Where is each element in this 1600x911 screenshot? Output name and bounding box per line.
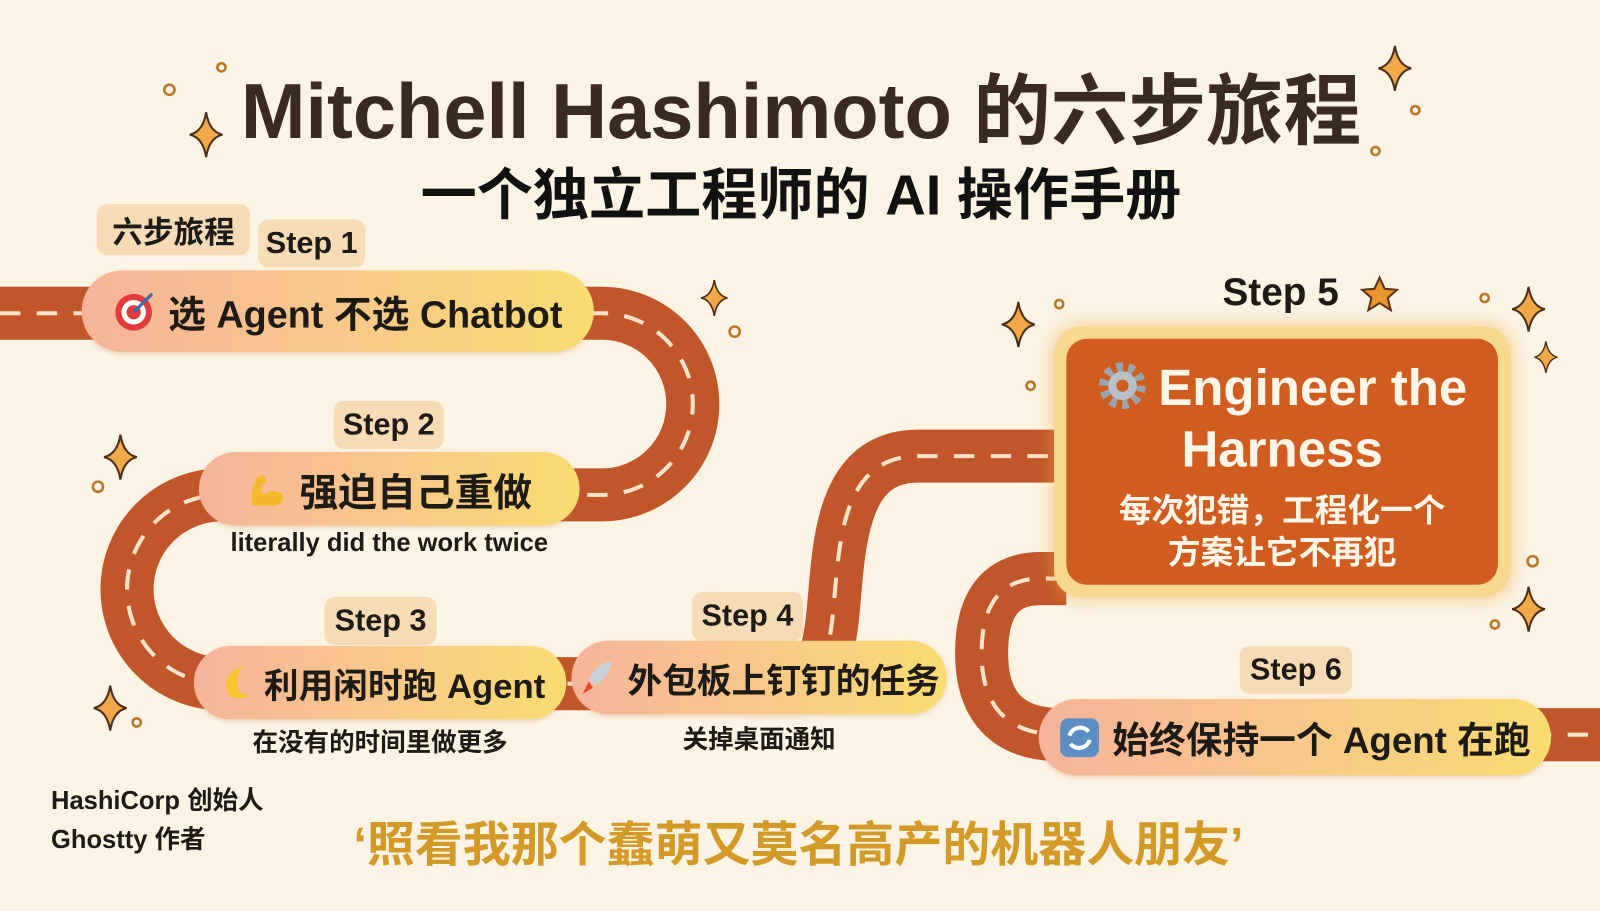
step 6 tag (1240, 646, 1352, 694)
step 6 tag: Step 6 (1250, 653, 1342, 686)
subtitle: 一个独立工程师的 AI 操作手册 (421, 163, 1181, 227)
step 1 tag (258, 219, 365, 267)
tag: six steps (97, 204, 250, 255)
step 4 pill: 外包板上钉钉的任务 (628, 662, 940, 701)
step 3 pill (194, 646, 566, 719)
step 6 pill: 始终保持一个 Agent 在跑 (1112, 719, 1531, 761)
author note: Ghostty 作者 (51, 826, 206, 854)
step 3 tag (324, 597, 437, 645)
step 5 heading: Engineer the (1158, 359, 1467, 416)
step 2 pill: 强迫自己重做 (299, 472, 532, 515)
step 2 tag: Step 2 (343, 408, 435, 441)
tag: six steps: 六步旅程 (112, 216, 235, 250)
quote: ‘照看我那个蠢萌又莫名高产的机器人朋友’ (354, 817, 1243, 871)
step 2 tag (334, 401, 444, 449)
step 5 box (1054, 327, 1510, 597)
step 4 pill (571, 641, 947, 714)
step 3 pill: 利用闲时跑 Agent (264, 667, 545, 706)
step 1 tag: Step 1 (266, 226, 358, 260)
step 3 caption: 在没有的时间里做更多 (253, 729, 508, 757)
step 1 pill (82, 270, 594, 352)
author note: HashiCorp 创始人 (51, 787, 264, 815)
step 4 tag (692, 592, 803, 641)
step 1 pill: 选 Agent 不选 Chatbot (168, 294, 562, 336)
step 5 description (1119, 492, 1445, 570)
step 3 tag: Step 3 (335, 604, 427, 637)
step 5 label: Step 5 (1222, 271, 1339, 314)
step 4 caption: 关掉桌面通知 (683, 726, 836, 754)
step 2 caption: literally did the work twice (230, 529, 548, 557)
title: Mitchell Hashimoto 的六步旅程 (241, 68, 1361, 155)
step 5 heading: Harness (1181, 420, 1383, 478)
step 5 description: 每次犯错，工程化一个 (1119, 492, 1445, 529)
step 4 tag: Step 4 (702, 599, 793, 633)
author note (51, 787, 264, 854)
step 5 description: 方案让它不再犯 (1168, 534, 1396, 570)
step 2 pill (199, 452, 580, 526)
step 5 heading (1099, 359, 1467, 478)
step 6 pill (1039, 699, 1551, 776)
